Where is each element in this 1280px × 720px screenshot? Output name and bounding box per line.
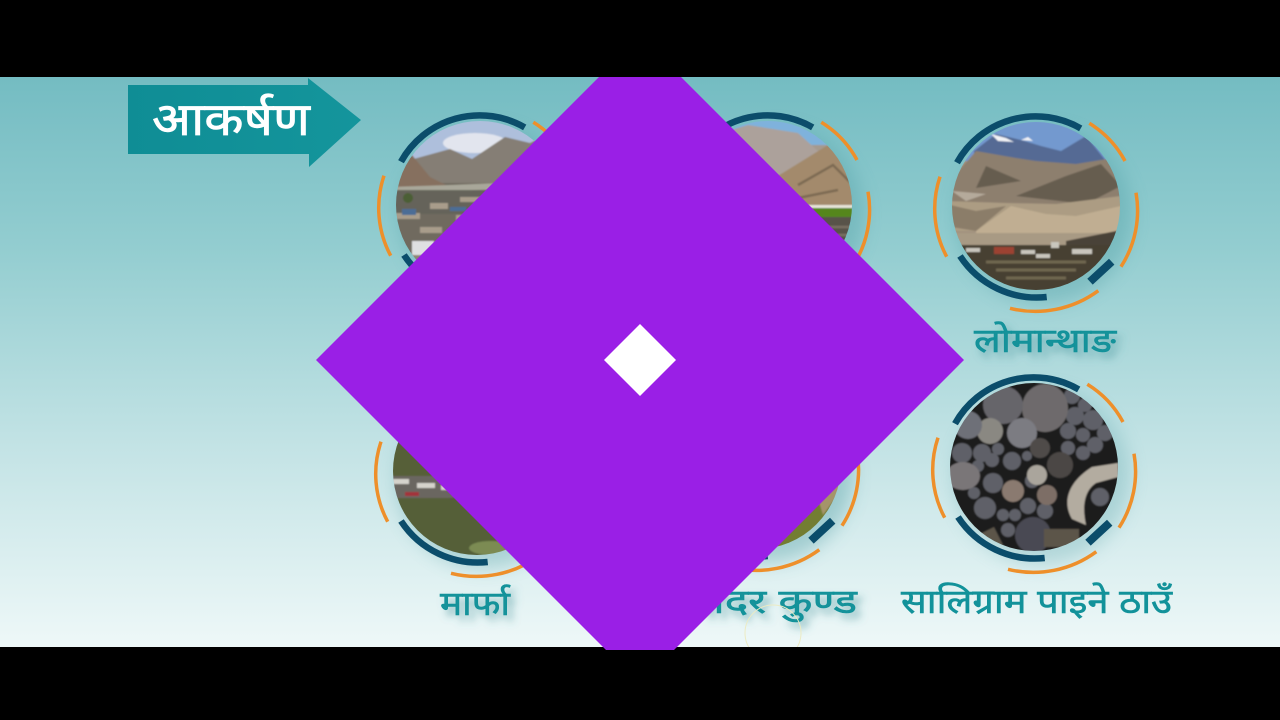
soft shadow [677,387,853,563]
soft shadow [397,393,573,569]
photo group [935,116,1138,311]
label: मार्फा: मार्फा [440,584,511,623]
attraction: मार्फा photo and label [374,441,524,625]
ring arcs [379,115,582,310]
heading arrow: आकर्षण [128,78,361,167]
attraction: top left town photo [376,112,546,267]
photo group [933,377,1136,572]
ring arcs [376,381,579,576]
attraction: दामोदर कुण्ड photo and label [706,464,866,647]
teal gradient stage background [0,77,1280,647]
photo group [374,441,524,578]
attraction: सालिग्राम पाइने ठाउँ photo and label [901,377,1174,621]
ring arcs [935,116,1138,311]
soft shadow [954,389,1130,565]
purple diamond overlay [316,77,964,650]
photo: valley with tan slope [733,121,852,240]
faint decorative circle [744,604,802,647]
ring arcs [933,377,1136,572]
label: सालिग्राम पाइने ठाउँ: सालिग्राम पाइने ठाउँ [901,582,1174,621]
heading text: आकर्षण [152,93,311,145]
soft shadow [400,127,576,303]
photo: Marpha village [393,442,506,555]
soft shadow [956,128,1132,304]
photo: Shaligram stones [950,383,1118,551]
photo: Lomanthang landscape [952,122,1120,290]
photo group [752,464,861,572]
label: लोमान्थाङ: लोमान्थाङ [974,322,1118,360]
soft shadow [688,127,864,303]
photo: Damodar Kunda [778,486,838,546]
white centre diamond [604,324,676,396]
photo: mountain town [396,121,534,260]
ring arcs [667,115,870,310]
attraction: लोमान्थाङ photo and label [935,116,1138,360]
label: दामोदर कुण्ड: दामोदर कुण्ड [652,583,858,622]
ring arcs [656,375,859,570]
attraction: top middle valley photo [726,112,872,256]
arrow shape [128,78,361,167]
